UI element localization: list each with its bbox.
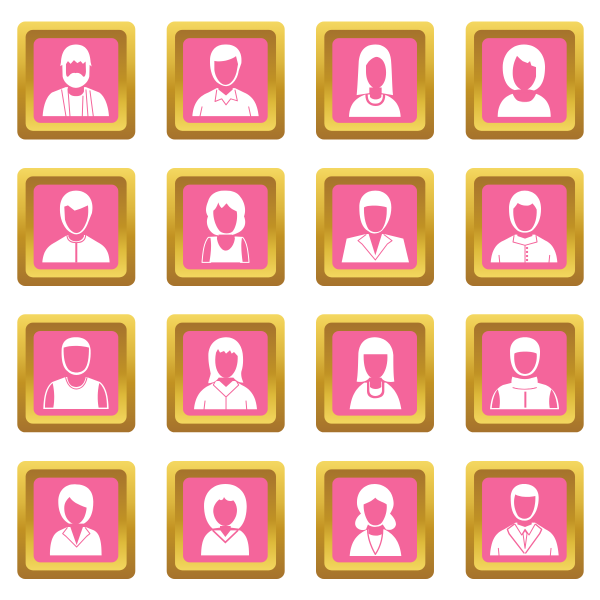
icon: man in buttoned shirt — [491, 191, 557, 262]
tile: woman with pigtails — [316, 461, 434, 579]
icon: man with round collar — [42, 191, 110, 262]
tile: man with open collar — [167, 22, 285, 139]
tile: man with turtleneck — [466, 314, 584, 432]
tile: woman with shaggy fringe — [167, 314, 285, 432]
icon: woman with pigtails — [350, 484, 401, 556]
tile: woman with bob haircut — [466, 22, 584, 139]
icon: woman with blunt fringe — [350, 337, 401, 409]
tile: woman in jacket — [316, 168, 434, 286]
icon: man in suit and tie — [490, 484, 559, 555]
tile: man in buttoned shirt — [466, 168, 584, 286]
icon: woman with bob haircut — [498, 44, 551, 117]
tile: man with round collar — [17, 168, 135, 286]
tile: woman with short hair in blazer — [17, 461, 135, 579]
tile: woman with rounded hair — [167, 461, 285, 579]
tile: woman with curly hair — [167, 168, 285, 286]
icon: woman with shaggy fringe — [194, 337, 257, 409]
icon: bearded man — [43, 44, 109, 116]
tile: woman with blunt fringe — [316, 314, 434, 432]
icon: man with open collar — [192, 44, 259, 116]
tile: bearded man — [17, 22, 135, 139]
icon: woman with long hair — [349, 44, 401, 117]
tile: man in suit and tie — [466, 461, 584, 579]
tile: man in sleeveless top — [17, 314, 135, 432]
icon: woman with curly hair — [202, 191, 249, 262]
icon: man in sleeveless top — [43, 337, 109, 409]
icon: woman with rounded hair — [201, 484, 249, 555]
icon: woman in jacket — [342, 191, 409, 262]
icon: woman with short hair in blazer — [50, 484, 102, 555]
icon: man with turtleneck — [490, 337, 559, 409]
tile: woman with long hair — [316, 22, 434, 139]
